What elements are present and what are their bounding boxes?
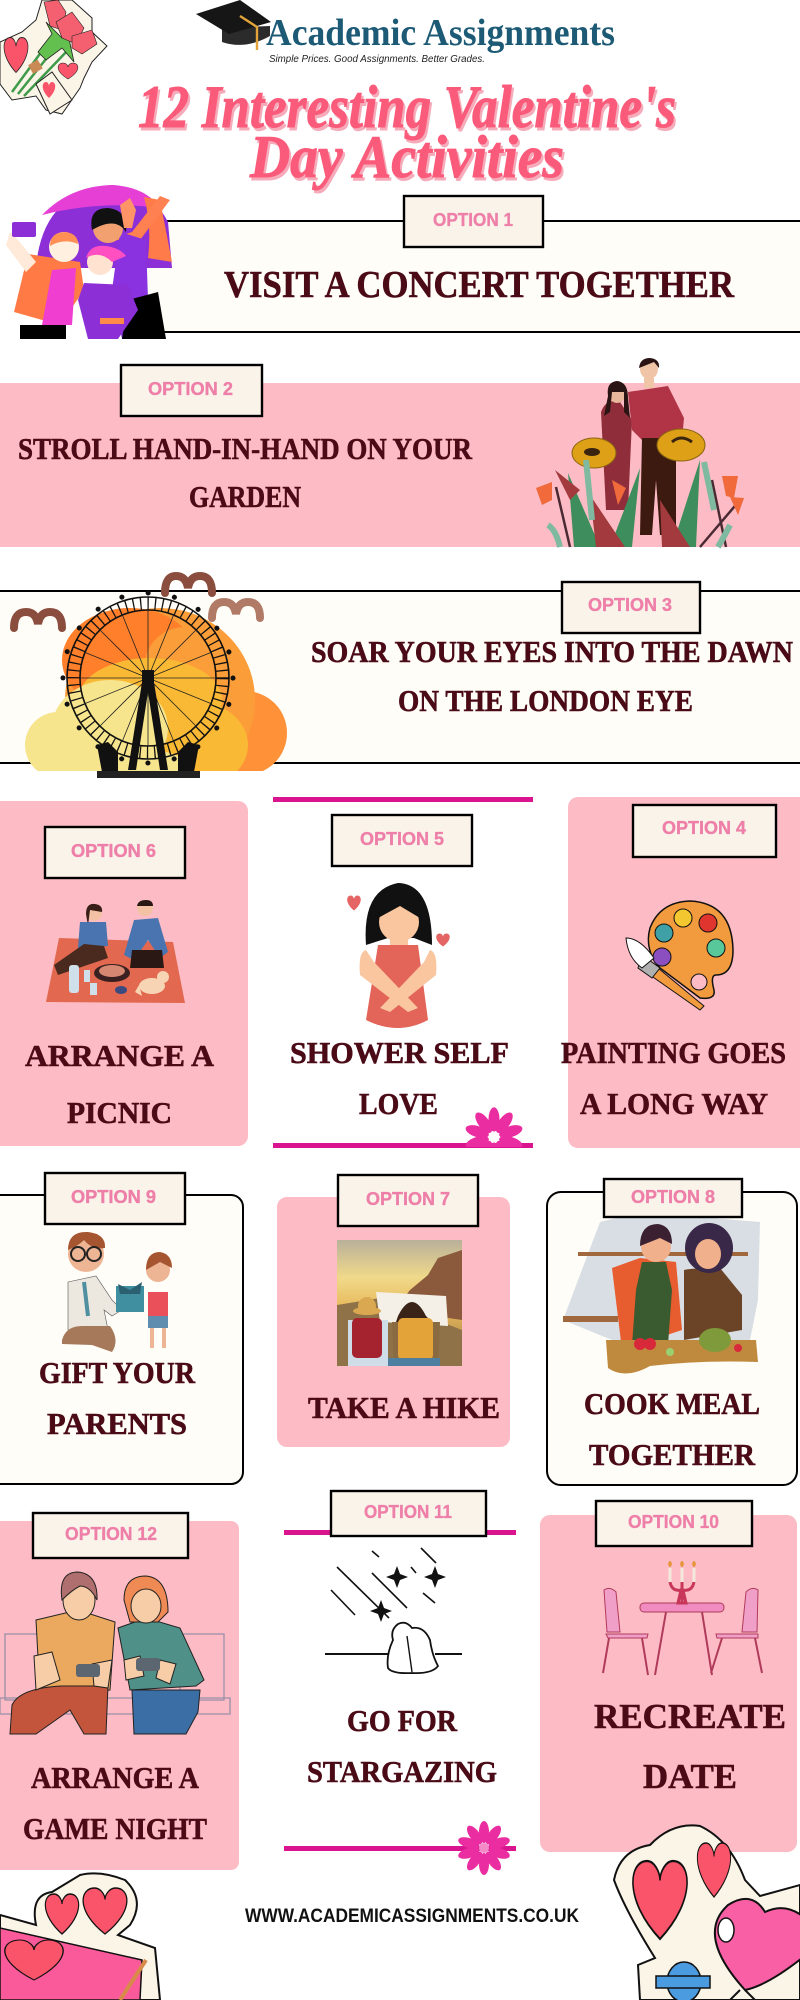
card xyxy=(547,1192,797,1485)
panel: option 7 xyxy=(277,1175,510,1447)
title xyxy=(138,74,676,190)
band xyxy=(0,383,800,547)
heading: SHOWER SELF xyxy=(290,1035,509,1070)
heading: ARRANGE A xyxy=(31,1760,200,1795)
heading: A LONG WAY xyxy=(580,1086,768,1121)
card xyxy=(0,801,248,1146)
band xyxy=(128,221,800,332)
card xyxy=(0,1521,239,1870)
band xyxy=(0,591,800,763)
heading xyxy=(584,1386,760,1472)
card xyxy=(540,1515,797,1852)
option label xyxy=(45,1173,185,1224)
title: Day Activities xyxy=(249,124,564,190)
heading: ON THE LONDON EYE xyxy=(398,683,693,718)
panel: option 8 xyxy=(547,1179,797,1485)
card xyxy=(0,1195,243,1484)
panel: option 10 xyxy=(540,1501,797,1852)
panel: option 1 xyxy=(6,185,800,339)
heading: GAME NIGHT xyxy=(23,1811,207,1846)
heading: GO FOR xyxy=(347,1703,458,1738)
tagline: Simple Prices. Good Assignments. Better Grades. xyxy=(269,53,485,65)
icon: flower xyxy=(457,1821,511,1875)
option label xyxy=(332,815,472,866)
heading: COOK MEAL xyxy=(584,1386,760,1421)
illustration: london eye xyxy=(25,593,287,792)
illustration: cooking together xyxy=(563,1212,760,1374)
illustration: stargazing xyxy=(325,1548,462,1673)
illustration: gift to parent xyxy=(62,1232,172,1352)
option label xyxy=(562,582,700,633)
sticker: tulip bouquet xyxy=(0,0,107,114)
heading: ARRANGE A xyxy=(25,1038,215,1073)
icon: paint palette xyxy=(626,901,733,1010)
heading: GARDEN xyxy=(189,479,301,514)
heading xyxy=(18,431,473,514)
website url: WWW.ACADEMICASSIGNMENTS.CO.UK xyxy=(245,1906,579,1927)
option label: OPTION 11 xyxy=(364,1502,452,1522)
option label xyxy=(33,1513,188,1558)
bottom rule xyxy=(273,1143,533,1148)
heading xyxy=(39,1355,196,1441)
heading xyxy=(307,1703,497,1789)
option label xyxy=(45,827,185,878)
illustration: concert selfie xyxy=(6,185,172,339)
option label xyxy=(404,196,543,247)
heading: LOVE xyxy=(359,1086,438,1121)
top rule xyxy=(284,1530,516,1535)
option label: OPTION 9 xyxy=(71,1187,156,1207)
heading: PARENTS xyxy=(47,1406,187,1441)
top rule xyxy=(273,797,533,802)
panel: option 9 xyxy=(0,1173,243,1484)
panel: option 4 xyxy=(561,797,800,1148)
heading: GIFT YOUR xyxy=(39,1355,196,1390)
option label xyxy=(331,1491,486,1536)
illustration: picnic xyxy=(46,900,185,1003)
heading: STARGAZING xyxy=(307,1754,497,1789)
option label xyxy=(596,1501,752,1546)
icon: birds xyxy=(14,576,260,628)
panel: option 12 xyxy=(0,1513,239,1870)
heading xyxy=(290,1035,509,1121)
option label: OPTION 10 xyxy=(628,1512,719,1532)
option label: OPTION 4 xyxy=(662,818,746,838)
heading xyxy=(594,1697,786,1796)
option label: OPTION 2 xyxy=(148,379,233,399)
illustration: couple among flowers xyxy=(536,358,744,547)
heading xyxy=(311,634,793,718)
heading xyxy=(25,1038,215,1130)
icon: graduation cap xyxy=(196,0,271,50)
heading xyxy=(561,1035,786,1121)
option label xyxy=(604,1179,742,1217)
option label xyxy=(633,805,776,857)
bottom rule xyxy=(284,1846,516,1851)
panel: option 3 xyxy=(0,576,800,792)
option label xyxy=(338,1175,478,1226)
panel: option 6 xyxy=(0,801,248,1146)
sticker: balloon hearts xyxy=(614,1825,800,2000)
heading: STROLL HAND-IN-HAND ON YOUR xyxy=(18,431,473,466)
option label xyxy=(121,365,262,416)
heading: DATE xyxy=(643,1757,737,1796)
heading: VISIT A CONCERT TOGETHER xyxy=(224,264,735,306)
card xyxy=(277,1197,510,1447)
heading: TAKE A HIKE xyxy=(308,1390,500,1425)
option label: OPTION 12 xyxy=(65,1524,157,1544)
option label: OPTION 3 xyxy=(588,595,672,615)
illustration: dinner table xyxy=(603,1561,762,1675)
option label: OPTION 6 xyxy=(71,841,156,861)
panel: option 2 xyxy=(0,358,800,547)
brand name: Academic Assignments xyxy=(266,12,615,54)
illustration: game night xyxy=(0,1572,230,1734)
heading: RECREATE xyxy=(594,1697,786,1736)
option label: OPTION 1 xyxy=(433,210,513,230)
panel: option 11 xyxy=(284,1491,516,1875)
logo xyxy=(196,0,615,65)
title: 12 Interesting Valentine's xyxy=(138,74,676,140)
icon: flower xyxy=(466,1107,522,1147)
heading xyxy=(23,1760,207,1846)
illustration: hikers photo xyxy=(337,1240,462,1366)
card xyxy=(568,797,800,1148)
option label: OPTION 7 xyxy=(366,1189,450,1209)
option label: OPTION 5 xyxy=(360,829,444,849)
illustration: self love xyxy=(347,883,450,1028)
heading: TOGETHER xyxy=(589,1437,756,1472)
option label: OPTION 8 xyxy=(631,1187,715,1207)
sticker: book and hearts xyxy=(0,1873,160,2000)
panel: option 5 xyxy=(273,797,533,1167)
heading: PICNIC xyxy=(67,1095,172,1130)
